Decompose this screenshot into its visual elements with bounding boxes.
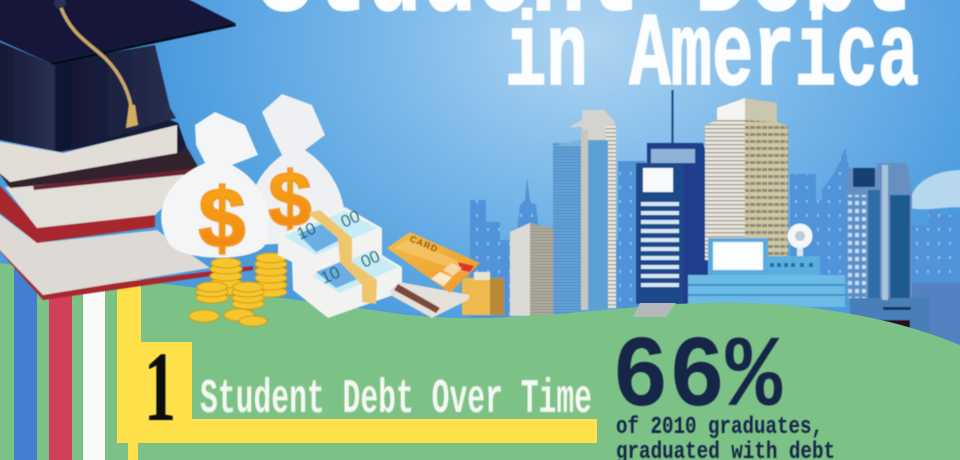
stacks of cash: 00 xyxy=(358,247,383,272)
navy tower with spire xyxy=(636,90,712,304)
satellite dish xyxy=(788,224,812,256)
small gold building xyxy=(462,272,504,315)
credit cards xyxy=(387,232,480,318)
colored ribbons xyxy=(14,268,105,460)
title: in America xyxy=(505,0,919,116)
statistic caption: of 2010 graduates, xyxy=(616,414,823,441)
title xyxy=(258,0,919,116)
section number: 1 xyxy=(144,331,176,442)
money bag back: $ xyxy=(268,155,312,243)
big number: 66% xyxy=(612,321,783,436)
stacks of cash: 10 xyxy=(294,219,319,244)
stack of books xyxy=(0,116,253,300)
city skyline xyxy=(462,90,960,353)
top book xyxy=(0,125,200,188)
road xyxy=(633,303,676,317)
beige skyscraper xyxy=(705,98,788,260)
credit cards: CARD xyxy=(408,234,440,255)
section header banner xyxy=(117,280,597,460)
bottom book xyxy=(0,232,253,300)
yellow ribbon and label box xyxy=(117,280,597,460)
graduation cap xyxy=(0,0,236,152)
green hill xyxy=(0,263,960,460)
stacks of cash xyxy=(278,207,402,318)
stacks of cash: 00 xyxy=(338,207,363,232)
stacks of cash: 10 xyxy=(318,263,343,288)
cloud xyxy=(910,170,960,209)
coins xyxy=(189,253,287,326)
foreground right building xyxy=(850,283,960,353)
section heading: Student Debt Over Time xyxy=(200,372,592,428)
white office building xyxy=(510,223,553,316)
tassel xyxy=(61,8,132,112)
statistic callout xyxy=(612,321,835,460)
tall glass tower xyxy=(553,110,616,313)
background skyline silhouette xyxy=(470,148,960,322)
low blue complex with billboard xyxy=(688,238,845,307)
money bag front xyxy=(161,112,269,265)
money bag back xyxy=(250,94,345,245)
middle book xyxy=(0,175,155,243)
right office tower xyxy=(847,163,912,300)
money bag front: $ xyxy=(199,171,245,265)
